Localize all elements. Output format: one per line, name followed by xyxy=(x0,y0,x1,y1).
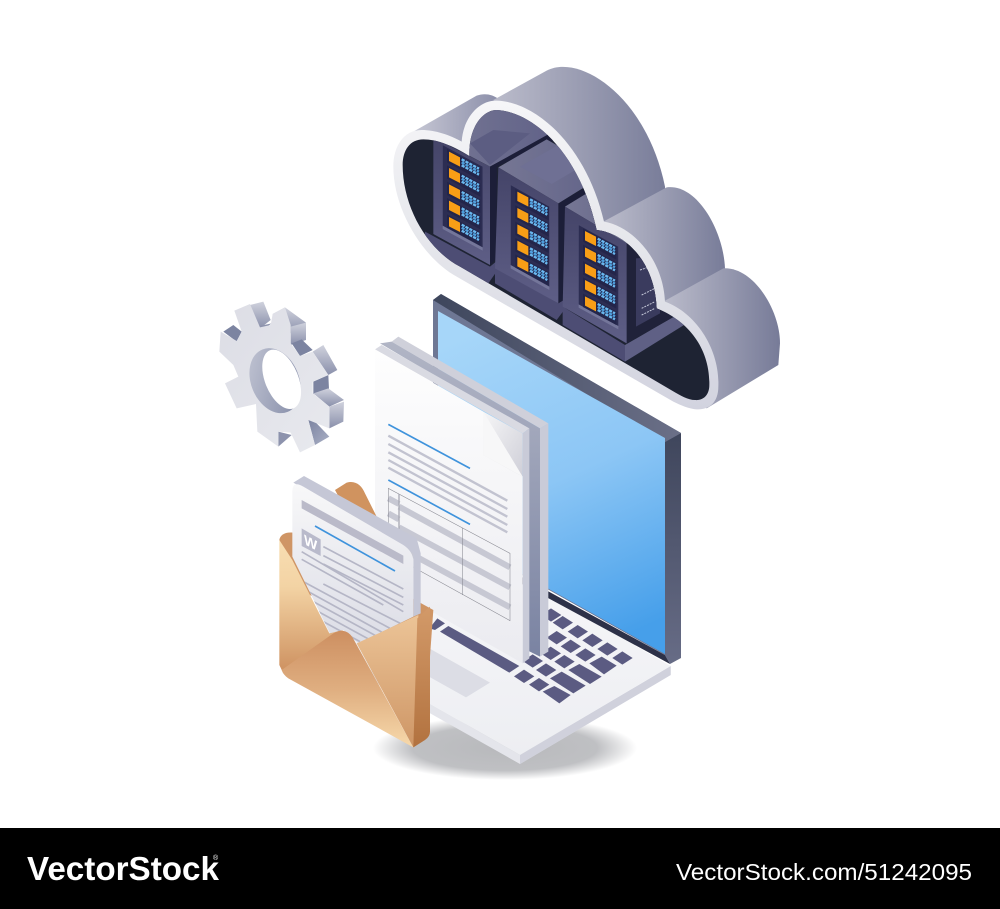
envelope front flap xyxy=(282,631,413,747)
W badge xyxy=(302,528,321,556)
envelope left panel xyxy=(279,540,343,673)
laptop base edge xyxy=(300,630,671,764)
rack 3 xyxy=(563,193,687,362)
cloud white rim xyxy=(393,101,718,409)
laptop xyxy=(300,294,681,764)
keyboard keys xyxy=(420,608,633,703)
gear side facets xyxy=(223,302,344,447)
rack 2 xyxy=(495,139,607,320)
watermark bar xyxy=(0,828,1000,909)
note paper xyxy=(292,476,421,643)
cloud extruded body xyxy=(413,67,780,408)
rack 1 xyxy=(425,100,555,283)
envelope right side xyxy=(413,607,430,747)
gear icon xyxy=(219,302,344,452)
note header bar xyxy=(302,500,403,564)
image url: VectorStock.com/51242095 xyxy=(676,859,972,885)
trackpad xyxy=(420,645,490,697)
documents stack xyxy=(375,337,548,663)
front document sheet xyxy=(375,345,529,663)
laptop drop shadow xyxy=(373,716,637,780)
document text lines xyxy=(388,424,507,532)
envelope with note xyxy=(279,476,433,747)
envelope inner back xyxy=(279,532,433,657)
laptop screen display xyxy=(438,311,665,654)
laptop base top xyxy=(300,530,671,755)
brand name: VectorStock xyxy=(27,850,220,887)
note blue heading xyxy=(315,526,395,571)
cloud dark interior xyxy=(403,110,709,400)
gear face xyxy=(219,304,329,452)
registered mark: ® xyxy=(213,854,219,862)
laptop screen side xyxy=(665,433,681,664)
back document xyxy=(380,337,548,657)
cloud with server racks xyxy=(393,67,780,409)
laptop screen frame xyxy=(433,294,681,655)
gear hole xyxy=(240,340,310,421)
envelope right panel xyxy=(357,615,418,747)
document table xyxy=(388,488,510,621)
screen hinge xyxy=(500,565,670,664)
note text lines xyxy=(302,547,407,642)
server racks xyxy=(425,100,687,362)
envelope back flap xyxy=(335,482,387,537)
W badge: W xyxy=(304,533,318,555)
